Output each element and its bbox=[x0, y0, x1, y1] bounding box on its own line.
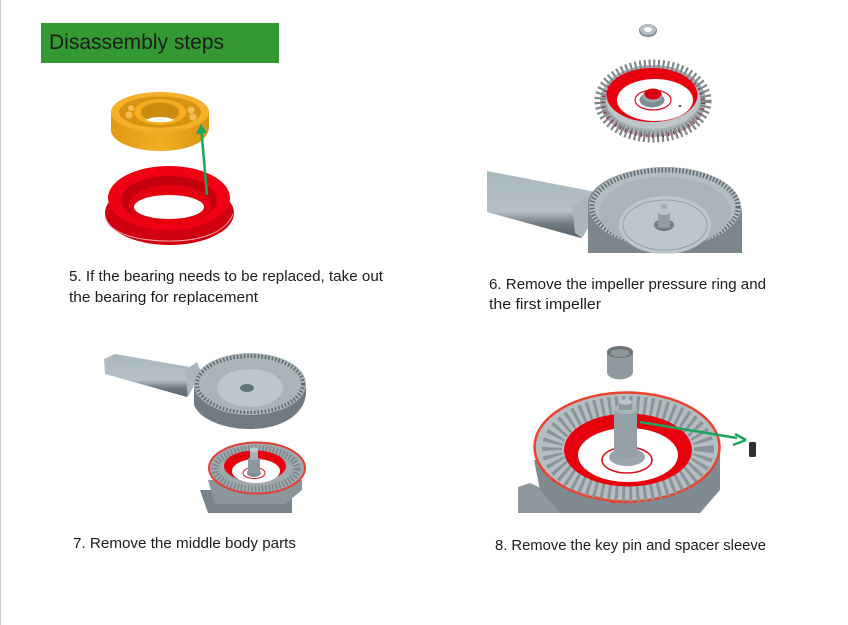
heading: Disassembly steps: Disassembly steps bbox=[49, 31, 224, 54]
text: step 6 caption: the first impeller bbox=[489, 296, 601, 313]
icon: yellow bearing bbox=[111, 92, 209, 151]
text: step 5 caption: 5. If the bearing needs to be replaced, take out bbox=[69, 268, 384, 285]
panel: step 5 bearing replacement bbox=[69, 92, 387, 306]
text: step 6 caption: 6. Remove the impeller pressure ring and bbox=[489, 276, 766, 293]
panel: step 7 remove middle body parts bbox=[73, 353, 306, 552]
icon: red bearing seat bbox=[105, 166, 234, 245]
icon: housing with arm and shaft bbox=[487, 167, 742, 254]
text: step 5 caption: the bearing for replacement bbox=[69, 289, 259, 306]
icon: impeller on lower body bbox=[518, 392, 720, 513]
panel: step 6 remove pressure ring and first impeller bbox=[487, 24, 770, 313]
icon: middle body with arm bbox=[104, 353, 306, 429]
text: step 8 caption: 8. Remove the key pin and spacer sleeve bbox=[495, 537, 766, 554]
icon: first impeller bbox=[600, 65, 706, 137]
text: step 7 caption: 7. Remove the middle body parts bbox=[73, 535, 296, 552]
page left edge line bbox=[0, 0, 1, 625]
icon: pressure ring bbox=[639, 24, 657, 37]
arrow: green up to bearing bbox=[196, 124, 207, 195]
icon: lower body with impeller bbox=[200, 442, 305, 513]
arrow: green pin removal bbox=[640, 422, 746, 445]
panel: step 8 remove key pin and spacer sleeve bbox=[495, 346, 766, 554]
icon: key pin bbox=[749, 442, 756, 457]
icon: spacer sleeve bbox=[607, 346, 633, 379]
heading: Disassembly steps bbox=[41, 23, 279, 63]
